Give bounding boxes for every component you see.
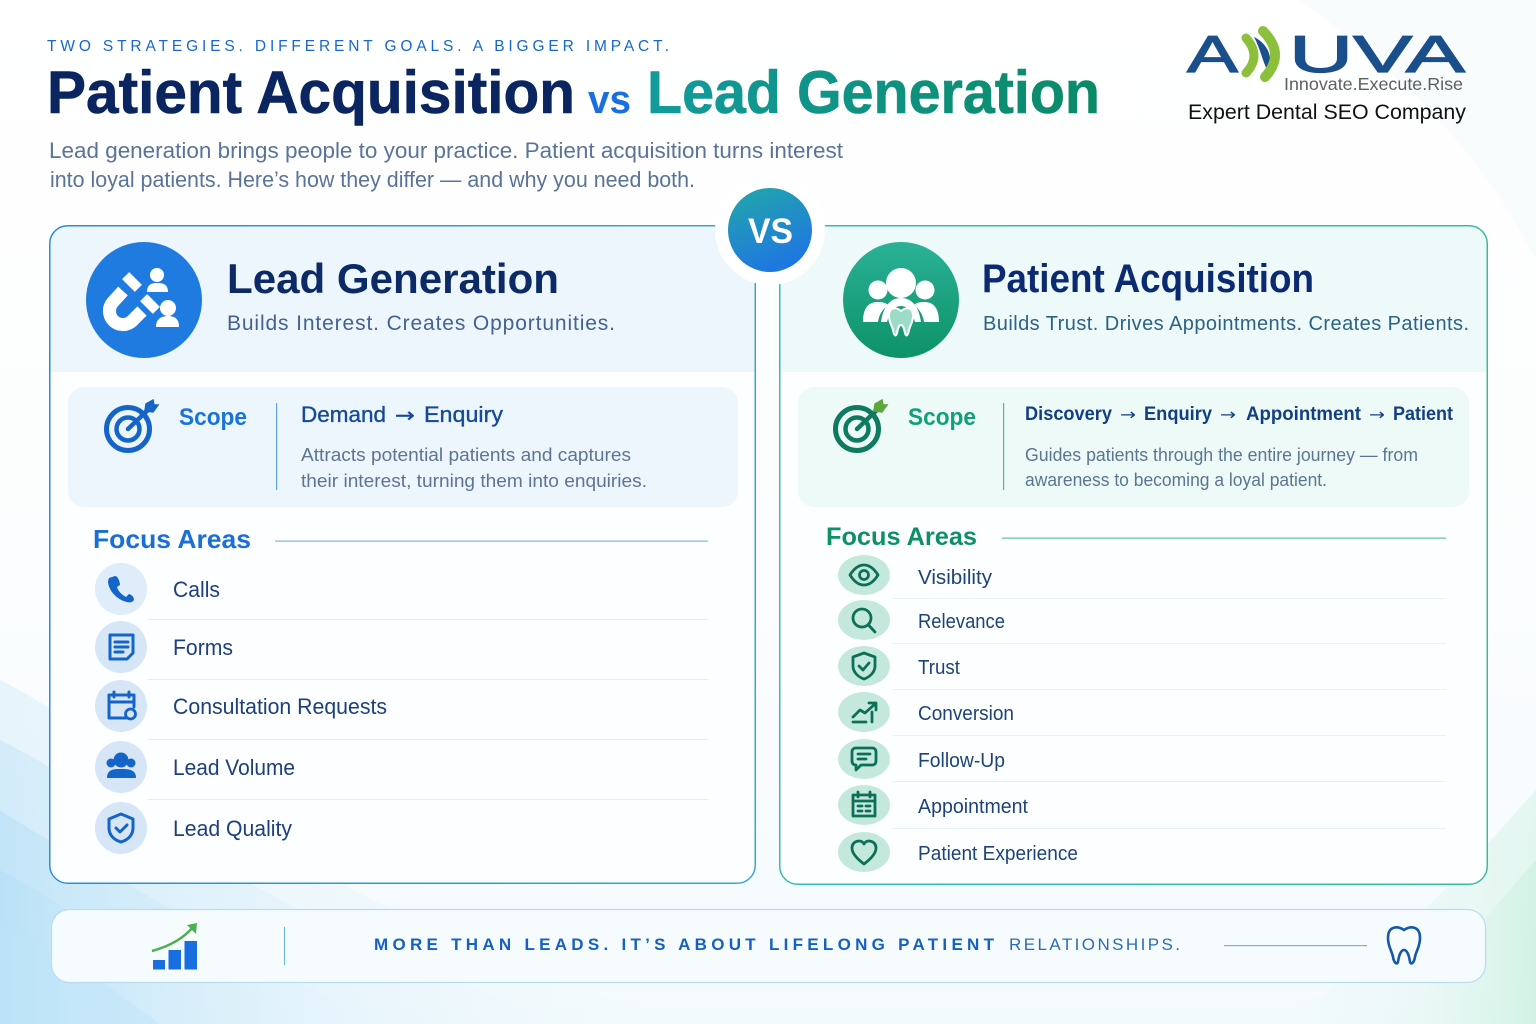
scope flow: Enquiry [424, 402, 503, 427]
scope flow: Enquiry [1144, 404, 1212, 425]
logo: Anuva [1187, 26, 1467, 124]
intro paragraph: into loyal patients. Here’s how they differ — and why you need both. [50, 167, 695, 192]
heading: lead generation: Lead Generation [227, 255, 559, 302]
scope flow: → [395, 403, 415, 427]
focus item: forms [95, 621, 233, 673]
scope flow: Appointment [1246, 404, 1362, 425]
focus item: trust: Trust [918, 657, 960, 679]
scope description: Attracts potential patients and captures [301, 444, 631, 465]
eyebrow heading: TWO STRATEGIES. DIFFERENT GOALS. A BIGGER IMPACT. [47, 38, 669, 55]
scope description [1025, 445, 1418, 490]
scope flow [301, 402, 503, 427]
logo: Anuva: A [1187, 26, 1238, 84]
icon: growth chart [152, 923, 197, 970]
scope flow [1025, 404, 1454, 425]
main title [47, 59, 1100, 126]
scope description: awareness to becoming a loyal patient. [1025, 470, 1327, 490]
bottom banner [52, 910, 1486, 982]
scope flow: Demand [301, 402, 386, 427]
tagline: lead generation: Builds Interest. Creates Opportunities. [227, 312, 615, 335]
scope box: lead generation [68, 387, 738, 507]
logo: Anuva: Expert Dental SEO Company [1188, 101, 1467, 124]
scope description [301, 444, 647, 491]
focus item: lead quality [95, 802, 292, 854]
icon: group of people with tooth [843, 242, 959, 358]
focus item: visibility: Visibility [918, 567, 992, 589]
logo: Anuva: Innovate.Execute.Rise [1284, 74, 1463, 94]
focus item: conversion: Conversion [918, 703, 1014, 725]
scope flow: → [1120, 405, 1136, 424]
focus item: trust [838, 646, 960, 686]
heading: patient acquisition: Patient Acquisition [982, 257, 1314, 301]
focus areas heading: Focus Areas [93, 524, 251, 554]
tagline: patient acquisition: Builds Trust. Drives Appointments. Creates Patients. [983, 313, 1469, 335]
icon: target [106, 400, 158, 450]
focus item: calls [95, 563, 220, 615]
scope flow: Discovery [1025, 404, 1112, 425]
scope flow: Patient [1393, 404, 1454, 425]
focus item: forms: Forms [173, 635, 233, 660]
focus item: patient experience: Patient Experience [918, 843, 1078, 865]
focus item: follow-up [838, 739, 1005, 779]
focus item: lead volume [95, 741, 295, 793]
panel: lead generation [49, 225, 756, 884]
banner message: MORE THAN LEADS. IT’S ABOUT LIFELONG PATIENT [374, 935, 995, 954]
scope description: Guides patients through the entire journey — from [1025, 445, 1418, 465]
focus item: follow-up: Follow-Up [918, 750, 1005, 772]
focus item: calls: Calls [173, 577, 220, 602]
focus item: consultation requests: Consultation Requests [173, 694, 387, 719]
icon: target [836, 400, 887, 450]
vs badge: VS [748, 212, 793, 251]
focus item: lead volume: Lead Volume [173, 755, 295, 780]
focus item: consultation requests [95, 680, 387, 732]
logo: Anuva: UVA [1289, 26, 1466, 84]
panel: patient acquisition [779, 225, 1488, 885]
focus item: visibility [838, 555, 992, 595]
focus item: relevance: Relevance [918, 611, 1005, 633]
focus item: lead quality: Lead Quality [173, 816, 292, 841]
scope label: Scope [179, 404, 247, 431]
focus item: patient experience [838, 832, 1078, 872]
vs badge [715, 175, 825, 285]
main title: Lead Generation [647, 59, 1100, 126]
scope flow: → [1369, 405, 1385, 424]
focus item: relevance [838, 600, 1005, 640]
focus item: appointment [838, 785, 1028, 825]
intro paragraph: Lead generation brings people to your practice. Patient acquisition turns interest [49, 138, 844, 163]
main title: vs [588, 78, 631, 122]
icon: magnet attracting people [86, 242, 202, 358]
scope description: their interest, turning them into enquiries. [301, 470, 647, 491]
main title: Patient Acquisition [47, 59, 575, 126]
focus item: appointment: Appointment [918, 796, 1028, 818]
scope flow: → [1220, 405, 1236, 424]
banner message: RELATIONSHIPS. [1009, 935, 1180, 954]
icon: tooth [1388, 927, 1420, 963]
intro paragraph [49, 138, 844, 192]
scope label: Scope [908, 404, 976, 431]
focus item: conversion [838, 692, 1014, 732]
scope box: patient acquisition [798, 387, 1469, 507]
focus areas heading: Focus Areas [826, 523, 977, 551]
